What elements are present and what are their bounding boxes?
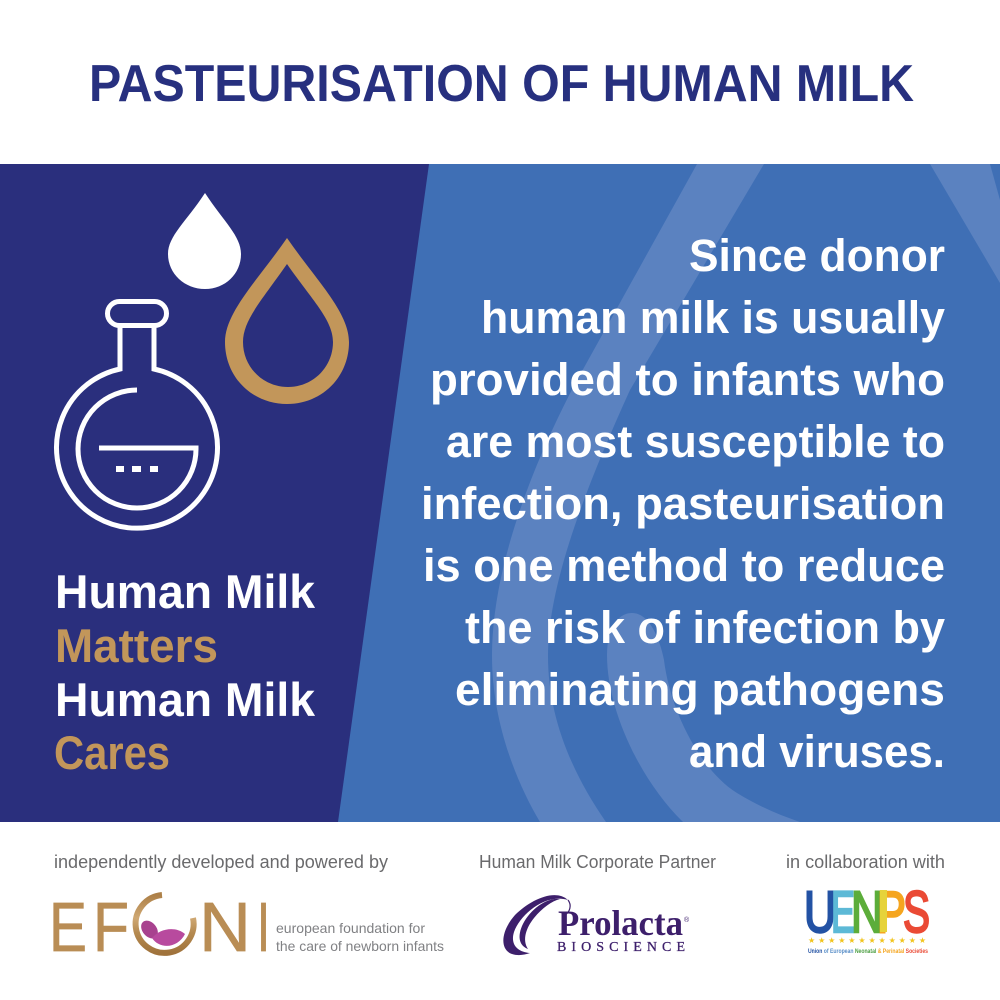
text block: statement: provided to infants who <box>430 354 945 405</box>
text block: statement: Since donor <box>689 230 945 281</box>
logo: EFCNI: E <box>49 888 87 966</box>
icon: laboratory flask <box>56 302 217 528</box>
text block: Human Milk Matters Human Milk Cares <box>54 565 316 779</box>
logo: UENPS: N <box>851 880 883 945</box>
logo: Prolacta Bioscience <box>503 895 690 955</box>
text block: Human Milk Matters Human Milk Cares: Human Milk <box>55 673 316 726</box>
text block: statement: is one method to reduce <box>423 540 945 591</box>
logo: EFCNI: F <box>93 888 129 966</box>
text: powered by heading: independently developed and powered by <box>54 852 388 872</box>
logo: UENPS <box>804 880 930 955</box>
logo: UENPS: S <box>903 880 930 945</box>
title: PASTEURISATION OF HUMAN MILK <box>89 55 914 113</box>
panel: blue statement panel <box>338 164 1000 822</box>
logo: EFCNI: I <box>257 888 270 966</box>
logo: UENPS: E <box>831 880 855 945</box>
logo: EFCNI: N <box>199 888 251 966</box>
logo: EFCNI: the care of newborn infants <box>276 938 444 954</box>
text block: statement: eliminating pathogens <box>455 664 945 715</box>
text block: statement: human milk is usually <box>481 292 945 343</box>
icon: gold outlined drop <box>225 238 349 404</box>
text block: statement <box>421 230 945 777</box>
text block: statement: the risk of infection by <box>465 602 945 653</box>
panel: navy left panel <box>0 164 440 822</box>
logo: Prolacta Bioscience: BIOSCIENCE <box>557 940 685 955</box>
text block: statement: and viruses. <box>689 726 945 777</box>
logo: EFCNI: european foundation for <box>276 920 425 936</box>
logo: UENPS: P <box>877 880 906 945</box>
text block: Human Milk Matters Human Milk Cares: Cares <box>54 726 170 779</box>
text: corporate partner heading: Human Milk Corporate Partner <box>479 852 716 872</box>
text block: statement: are most susceptible to <box>446 416 945 467</box>
icon: white milk drop <box>168 193 241 289</box>
logo: UENPS: U <box>804 880 836 945</box>
text block: Human Milk Matters Human Milk Cares: Human Milk <box>55 565 316 618</box>
logo: Prolacta Bioscience: Prolacta <box>558 903 683 943</box>
text block: statement: infection, pasteurisation <box>421 478 945 529</box>
logo: UENPS: ★★★★★★★★★★★★ <box>808 936 926 945</box>
text block: Human Milk Matters Human Milk Cares: Matters <box>55 619 218 672</box>
text: collaboration heading: in collaboration with <box>786 852 945 872</box>
logo: Prolacta Bioscience: ® <box>684 916 690 924</box>
logo: EFCNI <box>49 888 444 966</box>
logo: UENPS: Union of European Neonatal & Perinatal Societies <box>808 948 928 955</box>
